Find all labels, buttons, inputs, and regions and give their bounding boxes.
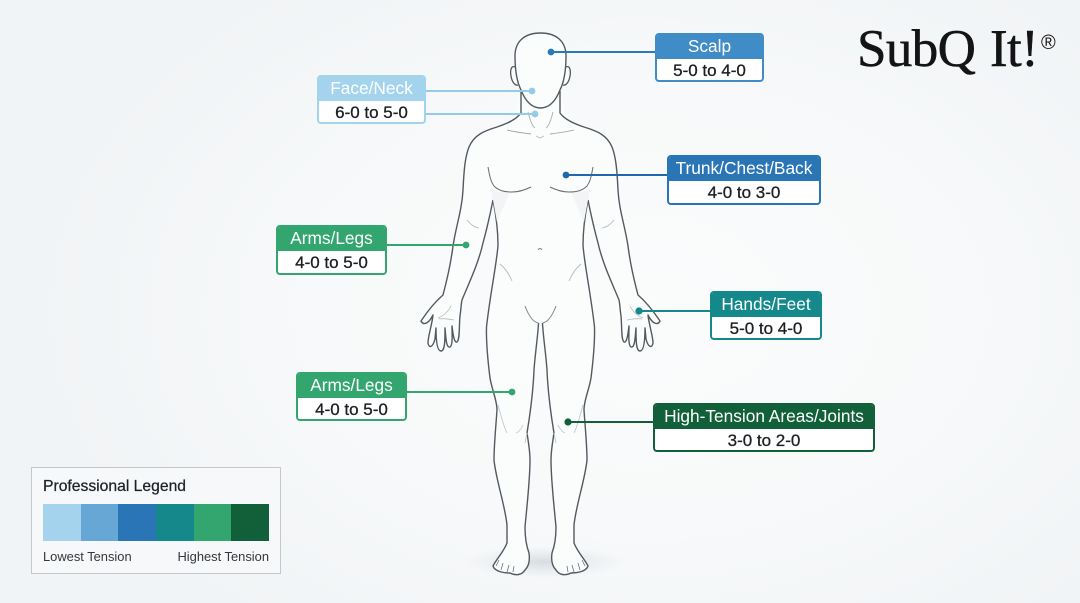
callout: face/neck [317,75,426,124]
floor shadow [465,546,625,578]
callout: scalp: 5-0 to 4-0 [673,61,746,80]
logo: SubQ It! [857,20,1038,78]
legend low label: Lowest Tension [43,549,132,564]
callout: scalp [655,33,764,82]
callout: trunk/chest/back: Trunk/Chest/Back [676,158,812,178]
logo: ® [1041,32,1056,54]
callout: high-tension areas/joints: 3-0 to 2-0 [728,431,800,450]
callout: face/neck: 6-0 to 5-0 [335,103,408,122]
callout: hands/feet: Hands/Feet [721,294,811,314]
callout: hands/feet: 5-0 to 4-0 [730,319,802,338]
callout: hands/feet [710,291,822,340]
legend colour scale [43,504,269,541]
callout: high-tension areas/joints: High-Tension Areas/Joints [664,406,864,426]
callout: arms/legs lower: Arms/Legs [310,375,393,395]
callout: trunk/chest/back: 4-0 to 3-0 [708,183,780,202]
line: joints [564,418,654,426]
line: trunk [563,172,668,178]
line: legs [406,389,515,395]
legend title: Professional Legend [43,478,186,495]
callout: arms/legs lower [296,372,407,421]
callout: arms/legs upper: Arms/Legs [290,228,373,248]
legend high label: Highest Tension [178,549,269,564]
line: neck [425,111,538,117]
callout: trunk/chest/back [667,155,821,205]
line: scalp [548,49,656,55]
head [515,33,566,108]
callout: high-tension areas/joints [653,403,875,452]
callout: arms/legs upper [276,225,387,275]
line: face [425,88,535,94]
callout: arms/legs upper: 4-0 to 5-0 [295,253,368,272]
callout: face/neck: Face/Neck [330,78,413,98]
callout: scalp: Scalp [688,36,731,56]
line: hands [635,307,711,315]
legend panel [31,467,281,574]
callout: arms/legs lower: 4-0 to 5-0 [315,400,388,419]
line: arms [386,242,469,248]
